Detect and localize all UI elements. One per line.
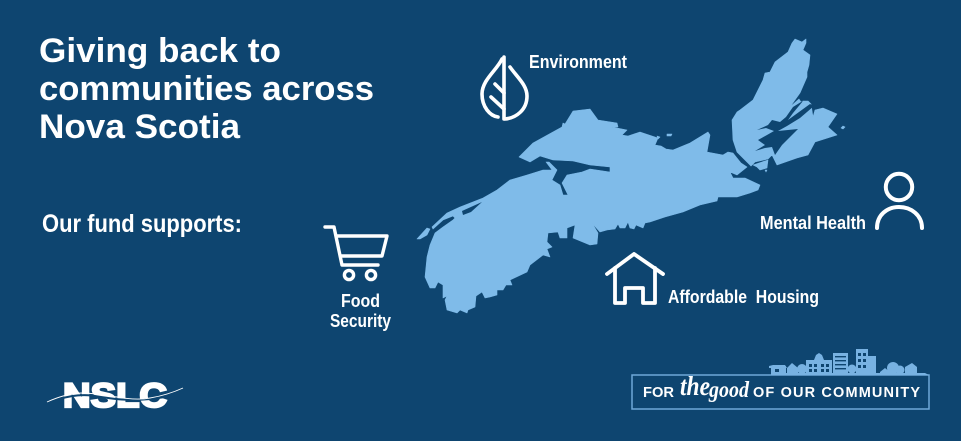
icon: shopping cart — [325, 227, 387, 280]
map: small coastal islands — [657, 126, 845, 172]
label: Affordable Housing: Affordable Housing — [668, 286, 819, 307]
label: Food Security: Food — [341, 290, 380, 311]
map: Cape Breton — [732, 39, 837, 166]
title: communities across — [39, 70, 374, 108]
map: Digby island — [417, 228, 430, 239]
badge frame — [632, 375, 929, 409]
map: mainland — [425, 109, 760, 313]
badge: for the good of our community: OF OUR COMMUNITY — [753, 385, 920, 401]
logo: NSLC — [47, 377, 183, 415]
map: Isle Madame — [753, 160, 768, 170]
icon: house — [607, 254, 663, 303]
badge: for the good of our community: good — [708, 377, 749, 402]
title: Nova Scotia — [39, 108, 241, 146]
skyline — [769, 349, 929, 375]
badge: for the good of our community — [632, 349, 929, 409]
map: Bras d'Or Lake — [755, 101, 814, 155]
label: Environment: Environment — [529, 51, 627, 72]
icon: leaf — [482, 57, 527, 119]
label: Food Security: Security — [330, 310, 392, 331]
label: Mental Health: Mental Health — [760, 212, 866, 233]
skyline windows — [775, 353, 866, 372]
icon: person — [877, 174, 922, 228]
badge text: FOR — [643, 385, 675, 401]
subheading: our fund supports: Our fund supports: — [42, 210, 242, 238]
title: Giving back to — [39, 32, 281, 70]
map: Annapolis Basin — [462, 202, 482, 215]
title — [39, 32, 374, 146]
label: Food Security — [330, 290, 392, 331]
map: Nova Scotia — [417, 39, 845, 313]
badge: for the good of our community: the — [680, 371, 710, 401]
logo: NSLC: NSLC — [63, 377, 167, 415]
